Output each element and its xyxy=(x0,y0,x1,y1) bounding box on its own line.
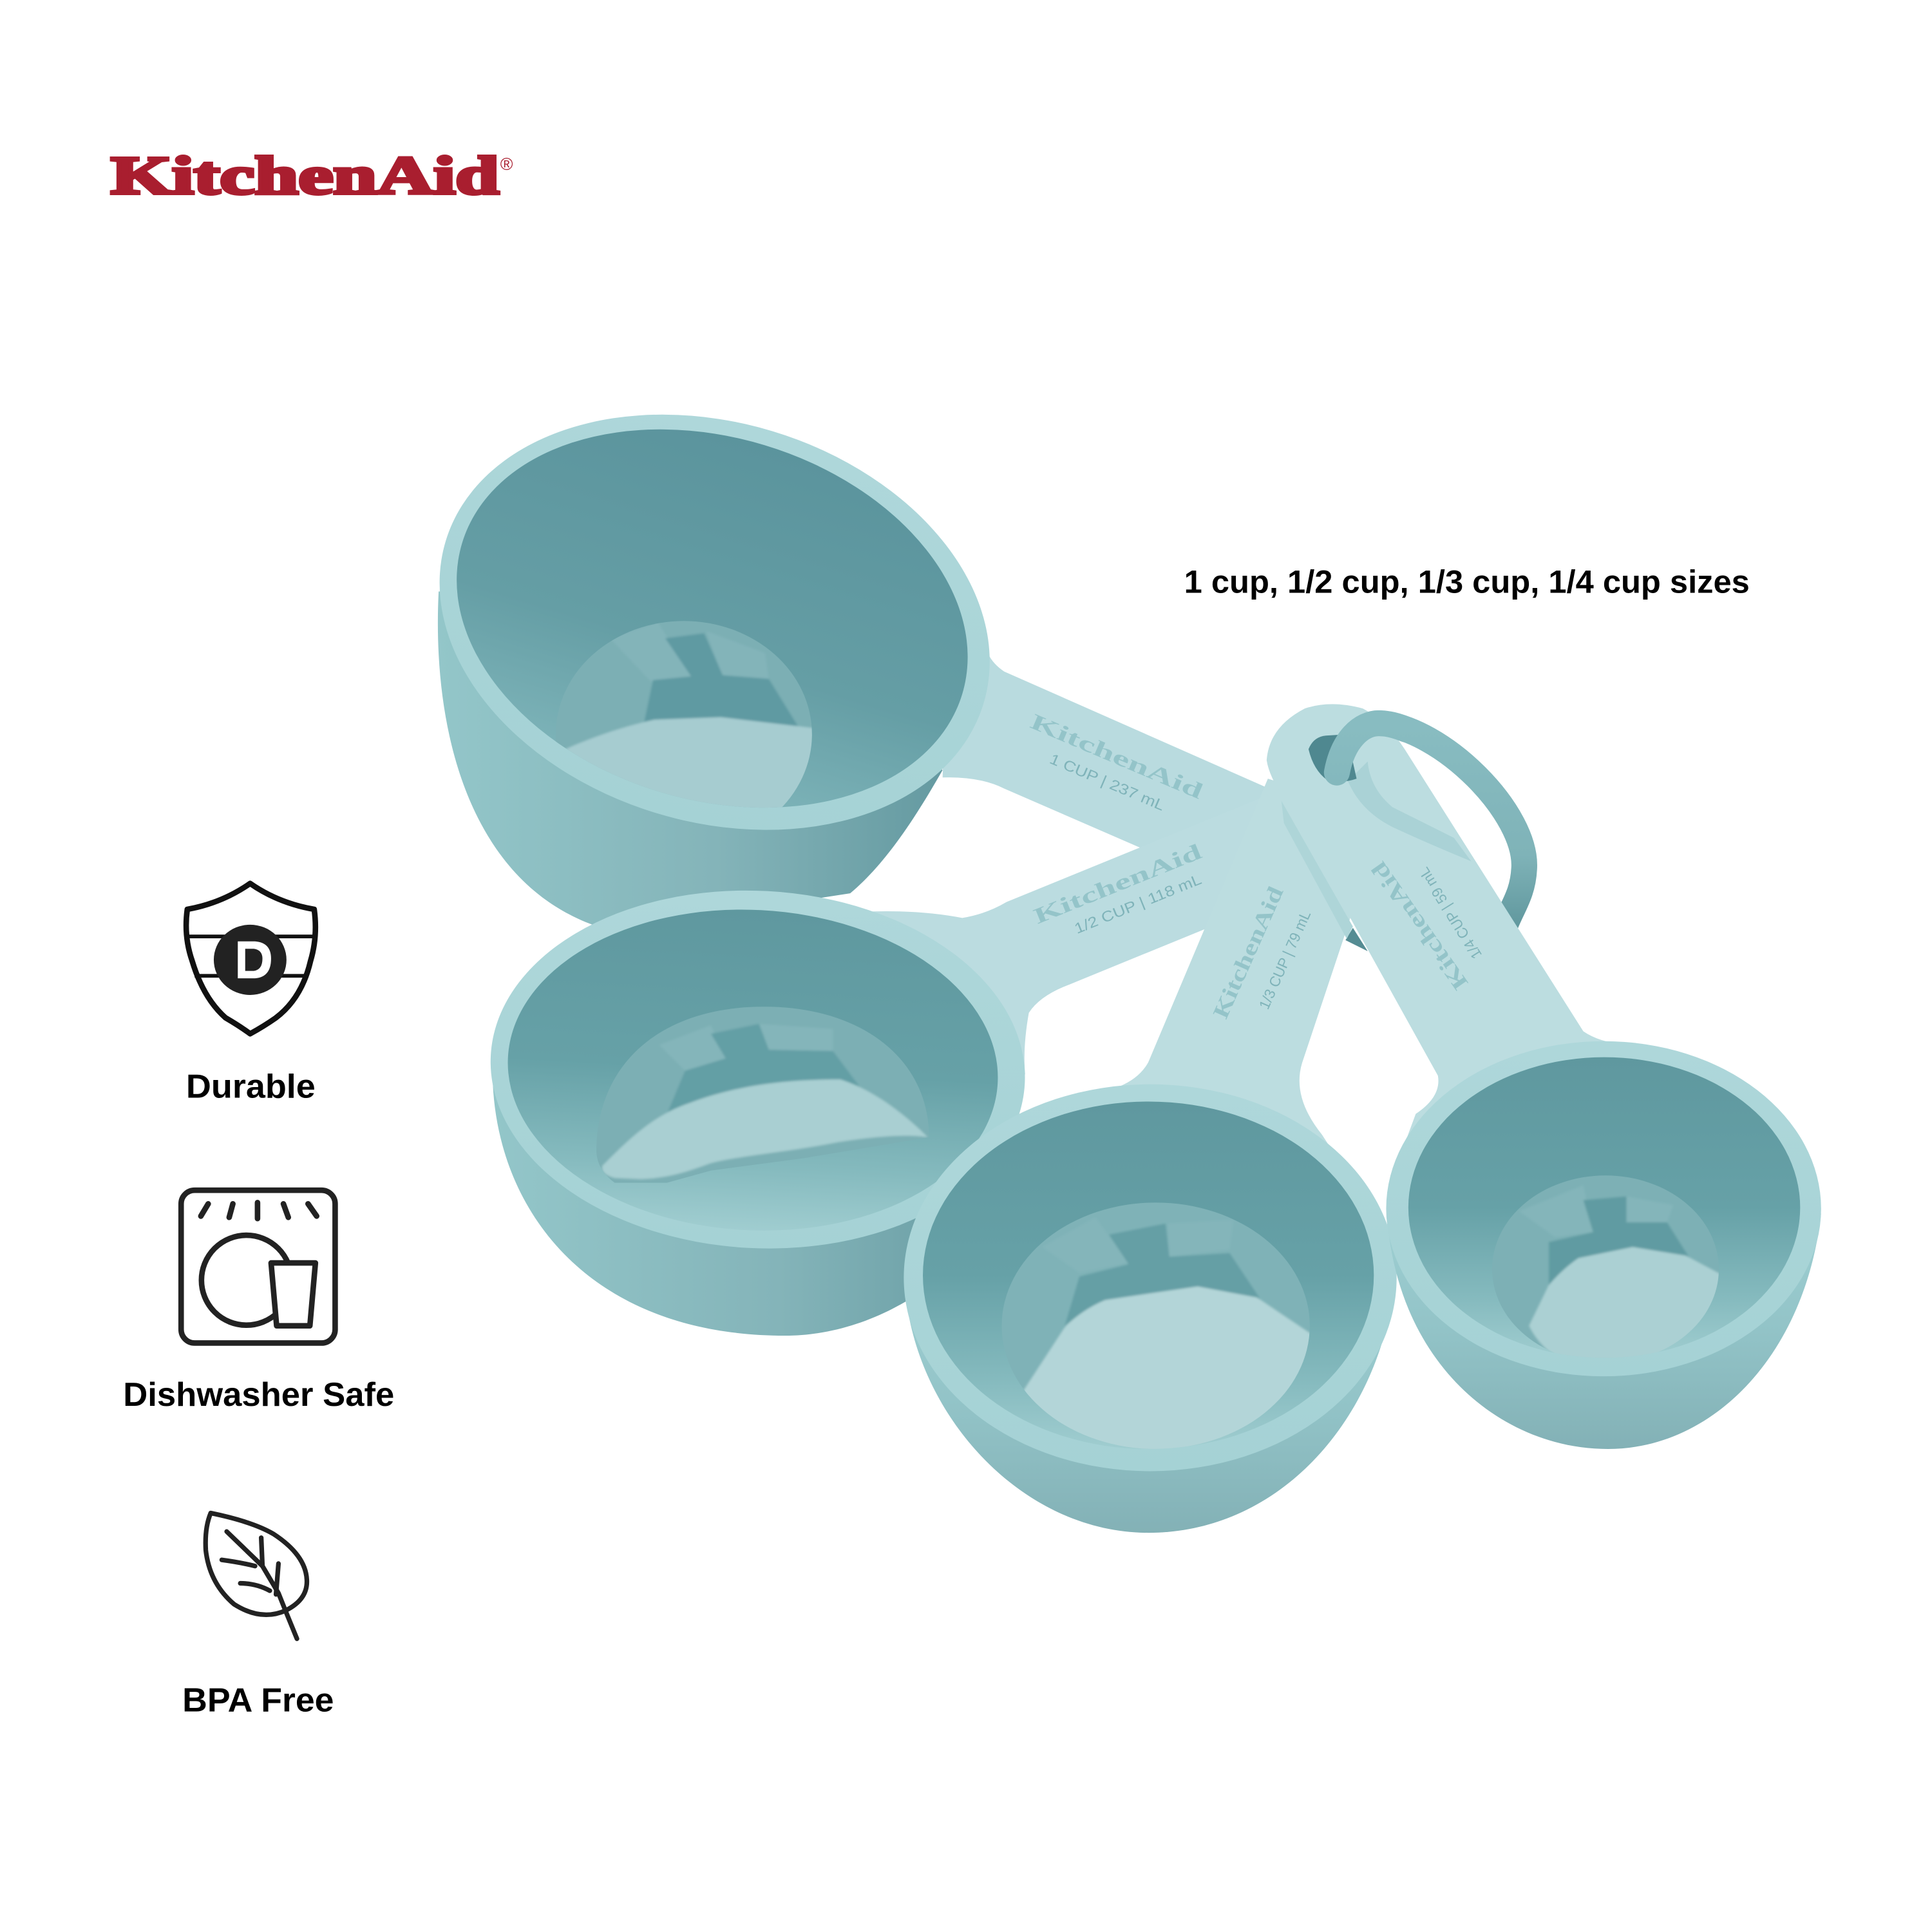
icon: shield xyxy=(186,884,316,1034)
embossed text: 1 cup handle xyxy=(1027,709,1206,814)
1/3 cup measuring cup xyxy=(904,779,1397,1533)
ring through hole xyxy=(1337,723,1406,773)
embossed text: 1 cup handle: 1 CUP | 237 mL xyxy=(1047,750,1168,814)
feature: dishwasher safe xyxy=(123,1190,394,1413)
hanging hole xyxy=(1309,734,1357,782)
embossed text: 1/2 cup handle: 1/2 CUP | 118 mL xyxy=(1072,871,1204,937)
label: dishwasher safe: Dishwasher Safe xyxy=(123,1376,394,1413)
1 cup measuring cup xyxy=(438,415,1265,925)
label: durable: Durable xyxy=(186,1068,316,1105)
icon: leaf xyxy=(205,1513,307,1639)
embossed text: 1/3 cup handle: 1/3 CUP | 79 mL xyxy=(1256,908,1314,1012)
feature: durable xyxy=(186,884,316,1105)
product photo: measuring cups xyxy=(388,350,1821,1533)
label: BPA free: BPA Free xyxy=(182,1681,334,1719)
embossed text: 1/3 cup handle xyxy=(1208,883,1314,1022)
shadow under handles xyxy=(1345,928,1368,951)
logo: KitchenAid xyxy=(111,146,513,205)
handle shadow band xyxy=(1348,761,1471,861)
embossed text: 1/4 cup handle: KitchenAid xyxy=(1367,857,1473,994)
1/2 cup measuring cup xyxy=(491,844,1234,1336)
shadow of 1/4 cup handle xyxy=(1282,801,1353,939)
embossed text: 1/2 cup handle xyxy=(1030,839,1205,937)
embossed text: 1/3 cup handle: KitchenAid xyxy=(1208,883,1288,1022)
sizes caption: 1 cup, 1/2 cup, 1/3 cup, 1/4 cup sizes xyxy=(1184,564,1750,600)
embossed text: 1 cup handle: KitchenAid xyxy=(1027,709,1206,804)
logo: KitchenAid: ® xyxy=(500,155,513,174)
logo: KitchenAid: KitchenAid xyxy=(111,146,499,205)
embossed text: 1/4 cup handle: 1/4 CUP | 59 mL xyxy=(1416,864,1485,962)
icon: dishwasher xyxy=(181,1190,335,1343)
feature: BPA free xyxy=(182,1513,334,1719)
embossed text: 1/4 cup handle xyxy=(1367,857,1485,994)
1/4 cup measuring cup xyxy=(1267,704,1821,1449)
embossed text: 1/2 cup handle: KitchenAid xyxy=(1030,839,1205,929)
ring loop xyxy=(1337,723,1524,924)
